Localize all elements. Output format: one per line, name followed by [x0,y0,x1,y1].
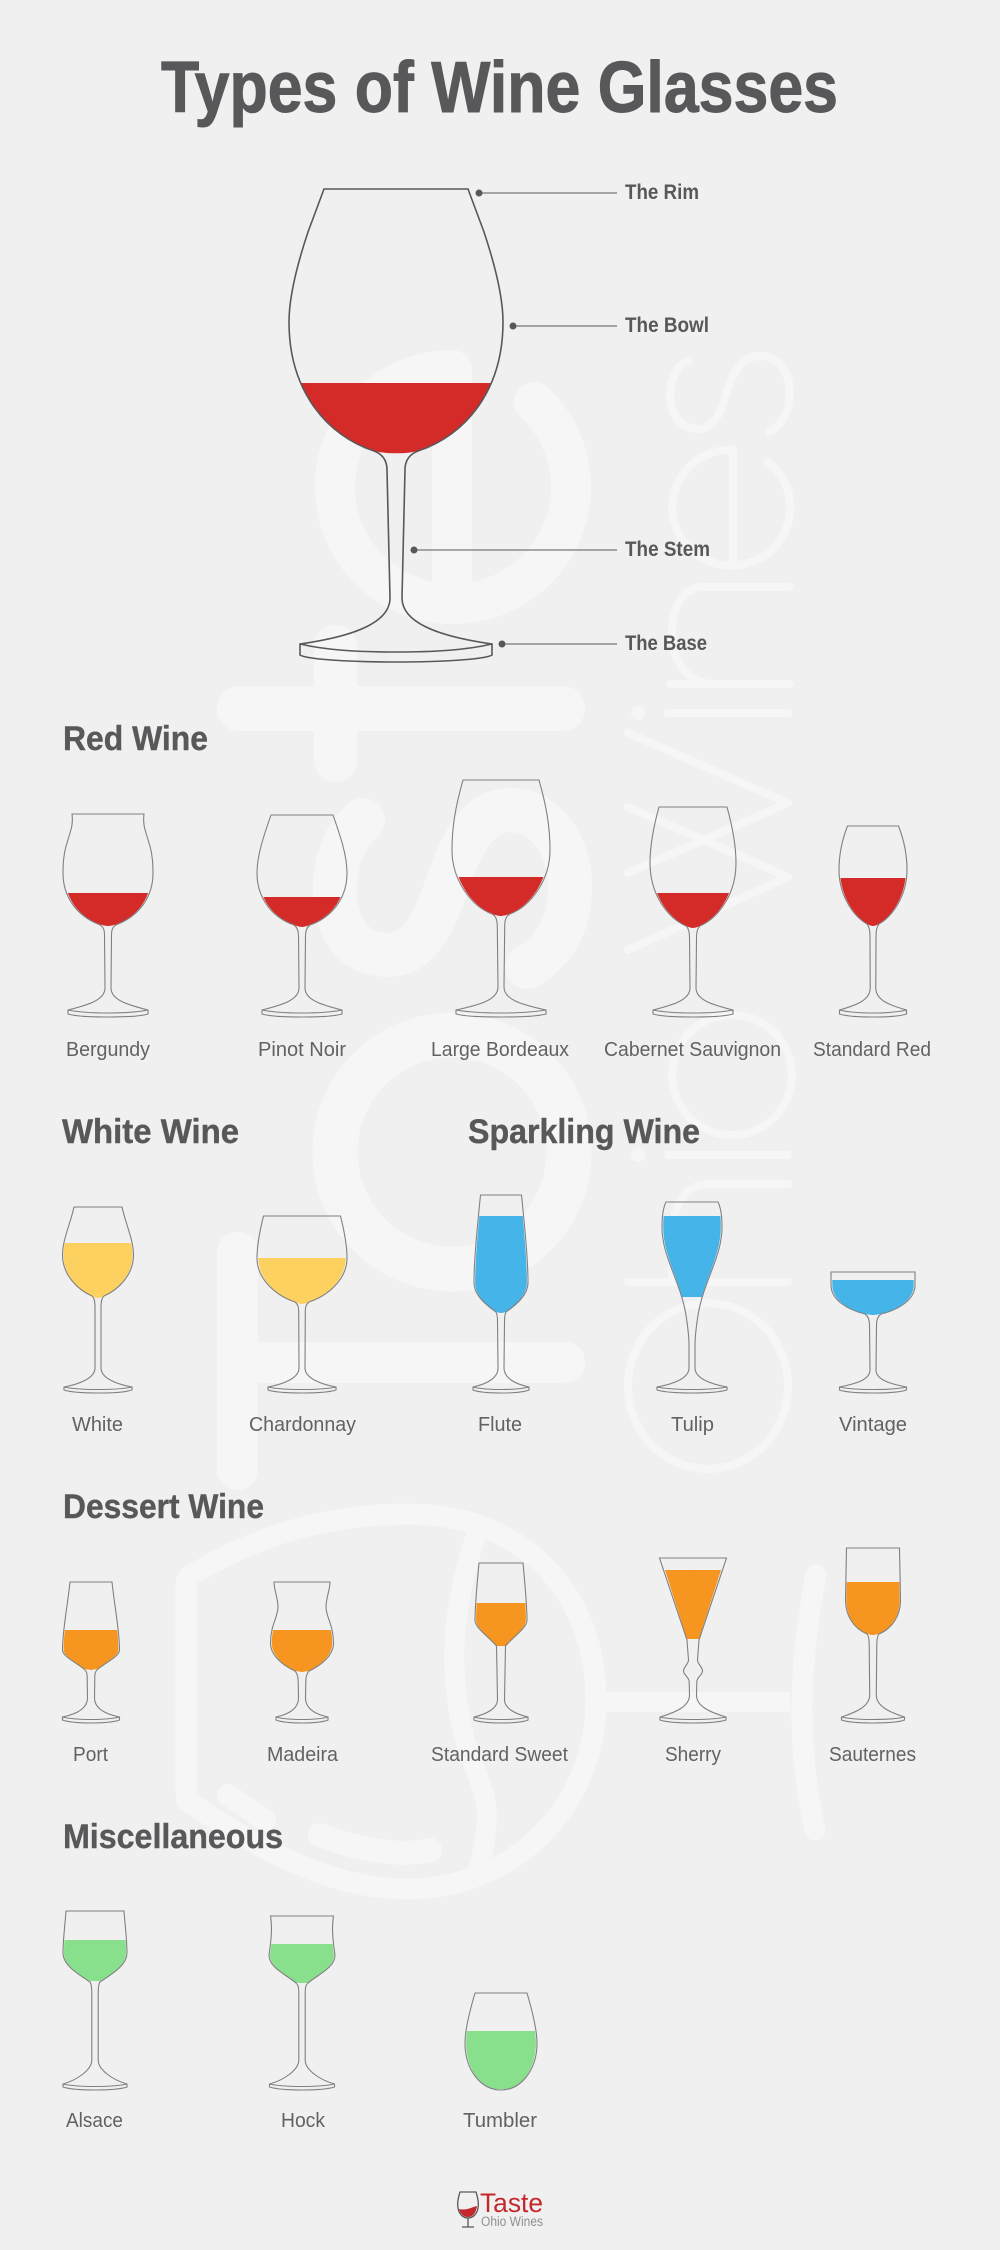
label: Alsace: Alsace [66,2110,123,2132]
title: Types of Wine Glasses [161,48,838,128]
glass: Tumbler [465,1993,537,2090]
heading: sparkling wine: Sparkling Wine [468,1113,700,1151]
glass: Vintage [831,1272,915,1393]
label: Standard Sweet: Standard Sweet [431,1744,568,1766]
glass: Bergundy [63,814,153,1017]
glass: Hock [269,1916,335,2090]
background watermark logo [186,356,816,1889]
panel: dessert wine [62,1488,916,1766]
heading: dessert wine: Dessert Wine [63,1488,264,1526]
label: Hock: Hock [281,2110,326,2132]
logo word: Ohio Wines: Ohio Wines [481,2214,543,2229]
glass: Port [62,1582,120,1723]
panel: miscellaneous [63,1818,537,2132]
glass: Madeira [270,1582,334,1723]
hero glass [289,189,503,662]
glass: Pinot Noir [257,815,347,1017]
logo word: Taste: Taste [480,2188,543,2218]
glass: Sauternes [842,1548,904,1723]
label: Large Bordeaux: Large Bordeaux [431,1039,569,1061]
label: Pinot Noir: Pinot Noir [258,1039,346,1061]
label: Sauternes: Sauternes [829,1744,916,1766]
panel: sparkling wine [468,1113,915,1436]
callout: the base: The Base [625,632,707,655]
label: White: White [72,1414,123,1436]
panel: red wine [63,720,931,1061]
label: Madeira: Madeira [267,1744,339,1766]
heading: miscellaneous: Miscellaneous [63,1818,283,1856]
heading: red wine: Red Wine [63,720,208,758]
glass: Standard Sweet [474,1563,528,1723]
label: Tulip: Tulip [671,1414,714,1436]
callout: the bowl: The Bowl [625,314,709,337]
label: Chardonnay: Chardonnay [249,1414,356,1436]
label: Vintage: Vintage [839,1414,907,1436]
label: Sherry: Sherry [665,1744,721,1766]
glass: Large Bordeaux [452,780,550,1017]
glass: Chardonnay [257,1216,347,1393]
glass: White [62,1207,134,1393]
glass: Cabernet Sauvignon [650,807,736,1017]
glass: Standard Red [839,826,907,1017]
callout: the stem [410,538,710,561]
panel: white wine [62,1113,356,1436]
glass: Flute [473,1195,529,1393]
label: Cabernet Sauvignon: Cabernet Sauvignon [604,1039,781,1061]
callout: the base [498,632,707,655]
callout: the rim: The Rim [625,181,699,204]
glass: Sherry [660,1558,726,1723]
label: Standard Red: Standard Red [813,1039,931,1061]
heading: white wine: White Wine [62,1113,239,1151]
glass: Tulip [657,1202,727,1393]
logo: Taste Ohio Wines [458,2188,543,2229]
label: Tumbler: Tumbler [463,2110,537,2132]
callout: the rim [476,181,699,204]
panel: anatomy of a glass [289,181,710,662]
label: Port: Port [73,1744,108,1766]
callout: the stem: The Stem [625,538,710,561]
icon: logo wine glass [458,2192,478,2227]
glass: Alsace [63,1911,127,2090]
callout: the bowl [510,314,709,337]
label: Flute: Flute [478,1414,522,1436]
label: Bergundy: Bergundy [66,1039,150,1061]
